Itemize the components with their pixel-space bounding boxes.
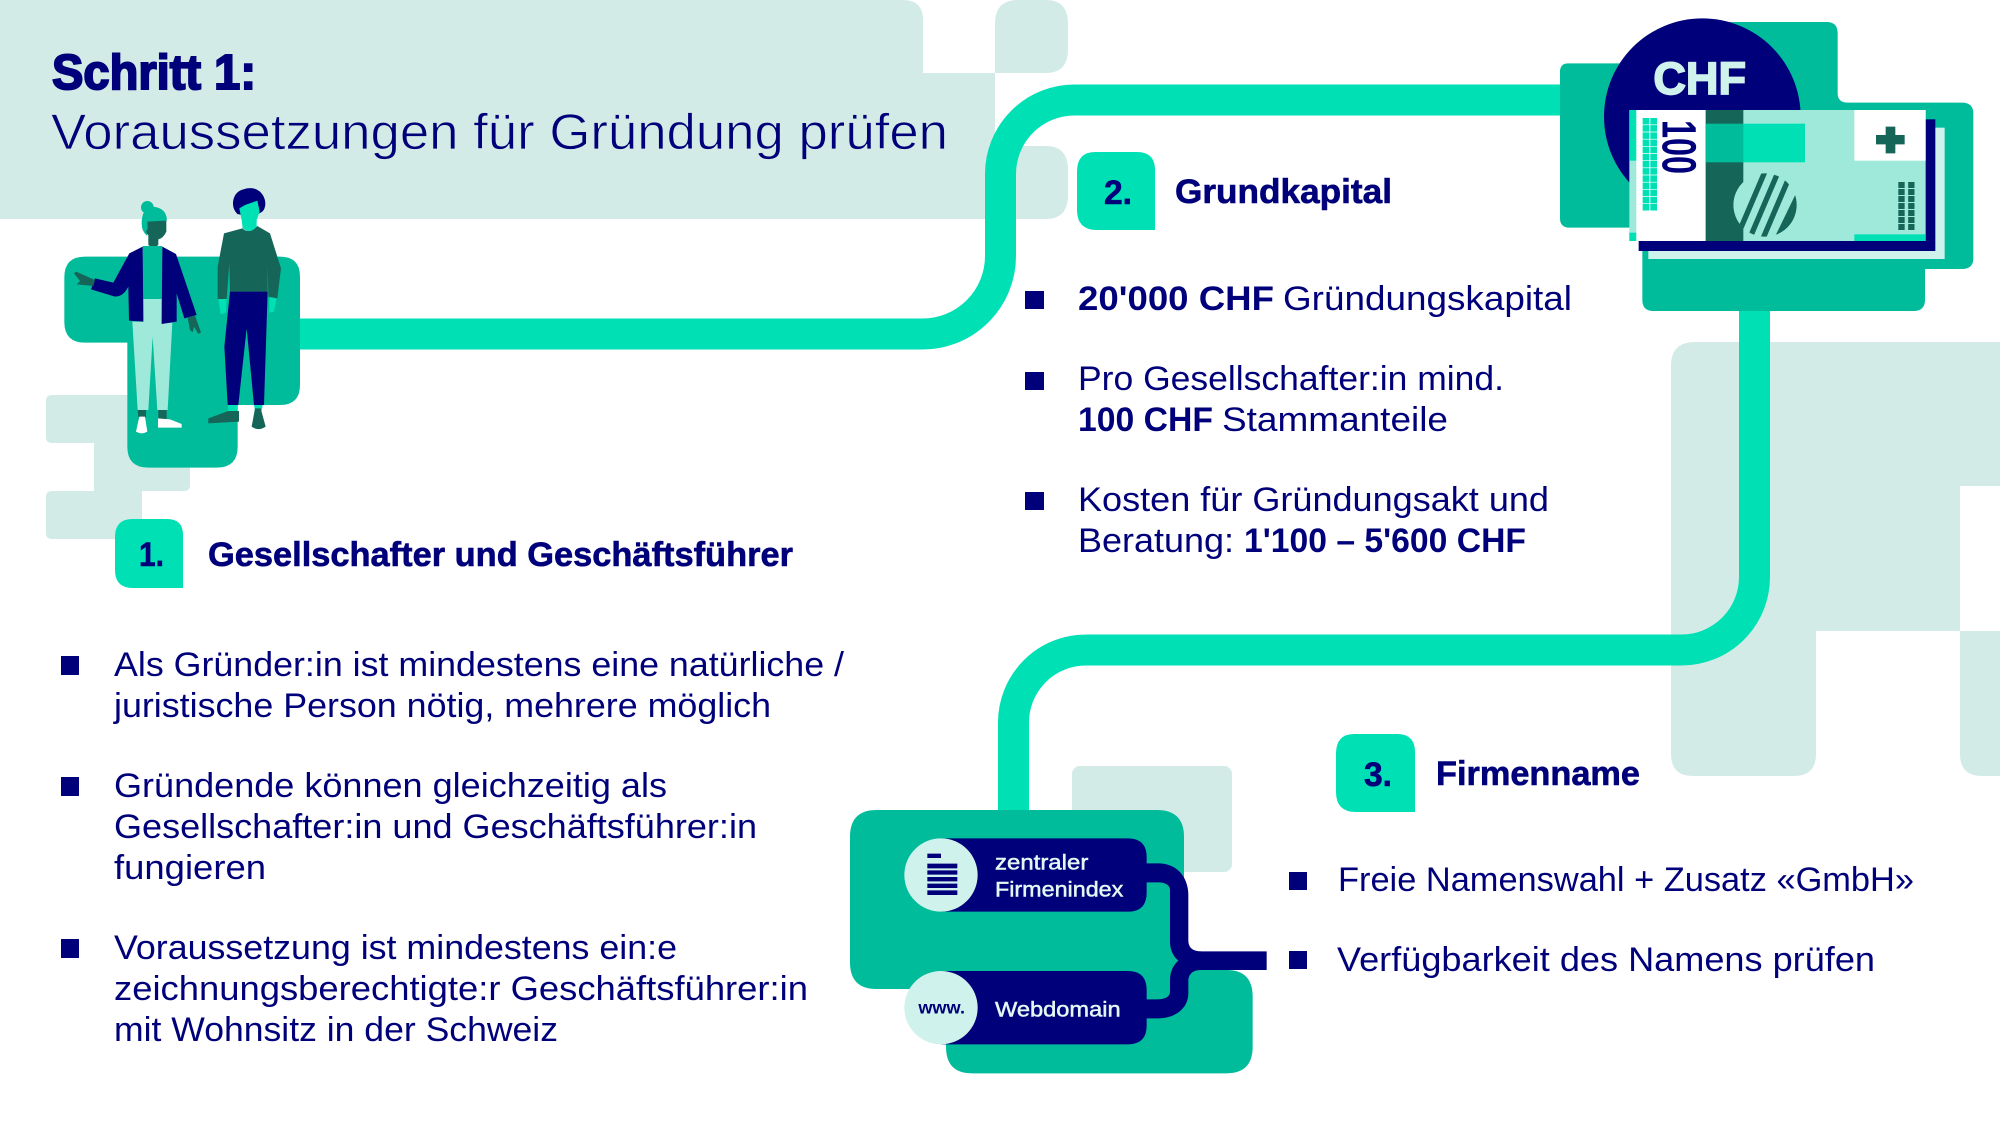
background: rectangle behind step 3 icon: [1072, 766, 1232, 872]
step 1 bullet list: Voraussetzung ist mindestens ein:e: [114, 929, 677, 967]
step 1 bullet list: Gesellschafter:in und Geschäftsführer:in: [114, 808, 757, 846]
pill: zentraler Firmenindex: zentraler: [995, 849, 1088, 874]
step 2 bullet list: Pro Gesellschafter:in mind.: [1078, 360, 1504, 398]
step 2 bullet list: 1'100 – 5'600 CHF: [1244, 522, 1526, 560]
step 1 heading: Gesellschafter und Geschäftsführer: [208, 536, 793, 574]
pill: Webdomain: www.: [917, 997, 965, 1017]
connector pipe: step 2 to step 3: [1014, 300, 1754, 820]
step 1 bullet list: Als Gründer:in ist mindestens eine natürliche /: [114, 646, 845, 684]
step 2 bullet list: 20'000 CHF: [1078, 280, 1274, 318]
banknote stack: [1629, 110, 1945, 259]
step 1 bullet list: juristische Person nötig, mehrere möglich: [113, 687, 771, 725]
pill: zentraler Firmenindex: [904, 838, 1147, 912]
pill: Webdomain: Webdomain: [995, 996, 1121, 1021]
step 2 bullet list: [1025, 280, 1572, 560]
pill: zentraler Firmenindex: Firmenindex: [995, 877, 1124, 902]
background: right stepped shape: [1671, 342, 2000, 776]
teal backdrop: [64, 257, 300, 468]
background: left stepped shapes: [46, 395, 190, 539]
illustration: CHF banknote: [1560, 18, 1973, 311]
step 2 heading: Grundkapital: [1175, 173, 1392, 211]
step 2 bullet list: Stammanteile: [1222, 401, 1448, 439]
step 2 bullet list: Beratung:: [1078, 522, 1234, 560]
step 2 bullet list: Kosten für Gründungsakt und: [1078, 481, 1549, 519]
step 1 bullet list: fungieren: [114, 849, 266, 887]
title subtitle line: Voraussetzungen für Gründung prüfen: [51, 104, 948, 160]
teal backdrop: [1560, 22, 1973, 311]
navy circle with CHF: [1604, 18, 1801, 215]
connector pipe: step 1 to step 2: [290, 100, 1570, 334]
banknote stack: 100: [1652, 120, 1706, 174]
bracket connector: [1145, 863, 1267, 1018]
person: man: [208, 188, 281, 429]
step 3 bullet list: [1289, 861, 1914, 979]
step 1 badge: 1.: [139, 536, 164, 574]
step 2 badge: 2.: [1104, 174, 1132, 212]
step 3 bullet list: Verfügbarkeit des Namens prüfen: [1337, 941, 1875, 979]
step 1 badge: [115, 519, 183, 588]
step 1 bullet list: zeichnungsberechtigte:r Geschäftsführer:in: [114, 970, 808, 1008]
step 1 bullet list: Gründende können gleichzeitig als: [114, 767, 667, 805]
pill: Webdomain: [904, 971, 1147, 1044]
step 1 bullet list: mit Wohnsitz in der Schweiz: [114, 1011, 558, 1049]
step 3 illustration backdrop: [850, 810, 1267, 1073]
step 2 bullet list: Gründungskapital: [1283, 280, 1572, 318]
step 1 bullet list: [61, 646, 845, 1049]
step 3 badge: [1336, 734, 1415, 812]
step 3 badge: 3.: [1364, 756, 1392, 794]
background: header panel: [0, 0, 1068, 219]
step 3 heading: Firmenname: [1436, 755, 1640, 793]
illustration: two people: [64, 188, 300, 468]
title: [51, 46, 948, 160]
person: woman: [74, 201, 201, 433]
step 3 bullet list: Freie Namenswahl + Zusatz «GmbH»: [1338, 861, 1914, 899]
title bold line: Schritt 1:: [52, 46, 256, 100]
step 2 bullet list: 100 CHF: [1078, 401, 1213, 439]
navy circle with CHF: CHF: [1653, 53, 1746, 104]
step 2 badge: [1077, 152, 1155, 230]
